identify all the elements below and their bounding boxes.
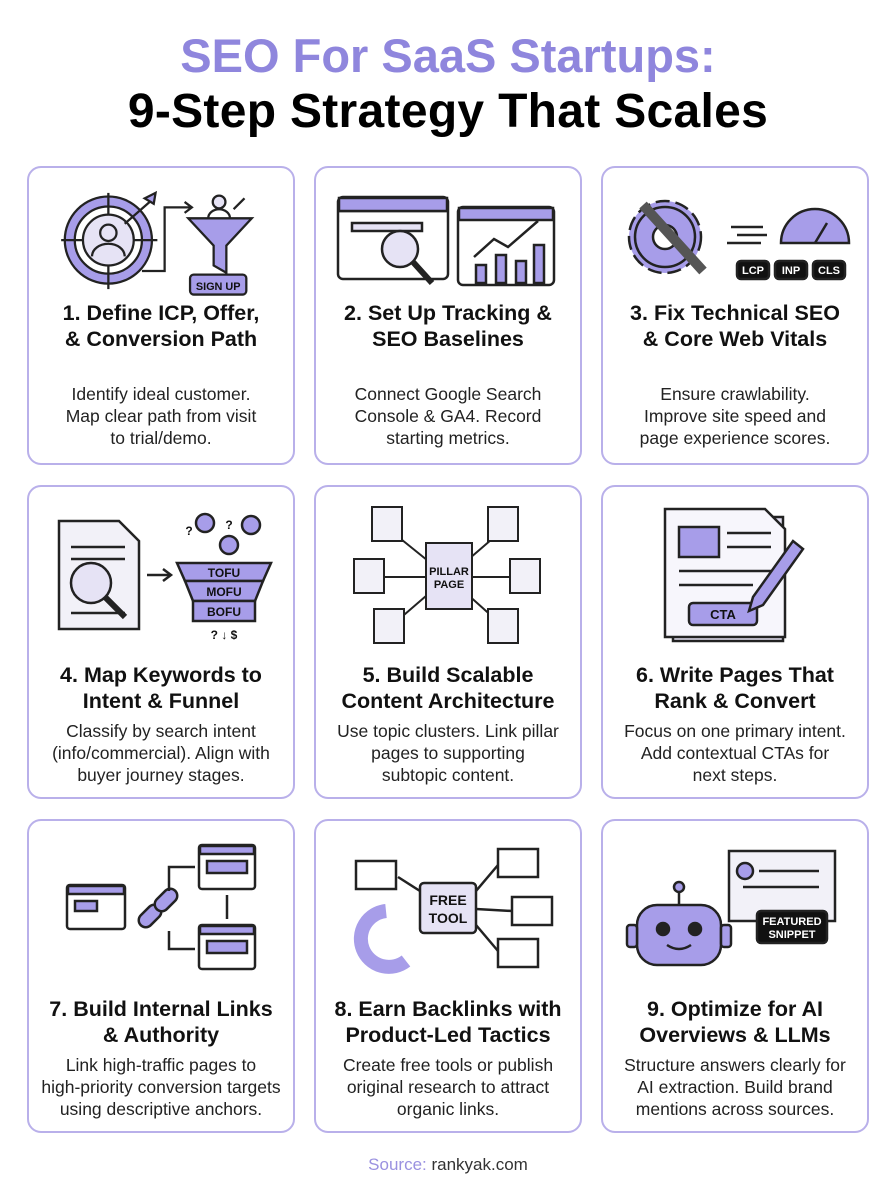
step 8 title: Product-Led Tactics: [345, 1023, 551, 1047]
step 6 title: [636, 663, 834, 713]
step 4 text: [52, 721, 270, 785]
step 1 title: & Conversion Path: [65, 327, 257, 351]
panel: step 3: [601, 166, 869, 465]
source footer: Source: rankyak.com: [368, 1155, 528, 1174]
panel: step 9: [601, 819, 869, 1133]
icon: browser with magnifier and chart: [336, 196, 556, 286]
icon: pillar and cluster pages: PILLAR: [429, 566, 469, 578]
panel: step 2: [314, 166, 582, 465]
step 3 title: 3. Fix Technical SEO: [630, 301, 840, 325]
icon: document and keyword funnel: [58, 512, 273, 642]
icon: document and keyword funnel: MOFU: [206, 585, 242, 599]
panel: step 4: [27, 485, 295, 799]
panel: step 7: [27, 819, 295, 1133]
step 3 title: & Core Web Vitals: [643, 327, 827, 351]
icon: free tool magnet: TOOL: [429, 910, 468, 926]
icon: target and funnel: [61, 190, 254, 296]
icon: document and keyword funnel: ? ↓ $: [211, 628, 238, 642]
step 8 title: 8. Earn Backlinks with: [334, 997, 562, 1021]
step 5 text: Use topic clusters. Link pillar: [337, 721, 559, 741]
step 9 text: [624, 1055, 846, 1119]
step 5 title: Content Architecture: [341, 689, 555, 713]
step 2 text: starting metrics.: [386, 428, 510, 448]
step 9 title: Overviews & LLMs: [639, 1023, 831, 1047]
step 7 title: & Authority: [103, 1023, 219, 1047]
step 1 text: [66, 384, 256, 448]
step 1 title: [63, 301, 259, 351]
step 4 title: Intent & Funnel: [83, 689, 239, 713]
icon: pillar and cluster pages: PAGE: [434, 579, 464, 591]
title line 2: 9-Step Strategy That Scales: [128, 85, 768, 138]
step 4 text: (info/commercial). Align with: [52, 743, 270, 763]
step 7 text: Link high-traffic pages to: [66, 1055, 256, 1075]
icon: gear, wrench and gauge: LCP: [742, 265, 764, 277]
step 4 text: Classify by search intent: [66, 721, 256, 741]
step 6 title: 6. Write Pages That: [636, 663, 834, 687]
step 4 text: buyer journey stages.: [77, 765, 245, 785]
step 7 text: using descriptive anchors.: [60, 1099, 262, 1119]
step 7 title: [49, 997, 273, 1047]
icon: free tool magnet: [354, 848, 554, 974]
icon: document and keyword funnel: BOFU: [207, 605, 241, 619]
step 2 title: 2. Set Up Tracking &: [344, 301, 552, 325]
step 6 text: Add contextual CTAs for: [641, 743, 829, 763]
icon: pillar and cluster pages: [353, 506, 541, 644]
step 2 text: [355, 384, 541, 448]
step 3 text: Ensure crawlability.: [660, 384, 810, 404]
step 7 text: [41, 1055, 281, 1119]
icon: document with CTA and pen: CTA: [710, 607, 736, 622]
step 5 text: subtopic content.: [382, 765, 514, 785]
step 9 text: AI extraction. Build brand: [637, 1077, 833, 1097]
panel: step 5: [314, 485, 582, 799]
step 5 title: 5. Build Scalable: [363, 663, 533, 687]
icon: gear, wrench and gauge: CLS: [818, 265, 840, 277]
icon: gear, wrench and gauge: INP: [782, 265, 800, 277]
step 6 text: next steps.: [693, 765, 777, 785]
step 1 text: Map clear path from visit: [66, 406, 256, 426]
step 3 title: [630, 301, 840, 351]
icon: linked pages: [66, 844, 256, 970]
icon: document with CTA and pen: [664, 508, 805, 642]
step 6 text: Focus on one primary intent.: [624, 721, 846, 741]
icon: gear, wrench and gauge: [628, 200, 850, 280]
icon: robot and snippet bubble: FEATURED: [762, 916, 822, 928]
icon: document and keyword funnel: ?: [185, 524, 193, 538]
step 8 text: [343, 1055, 553, 1119]
icon: target and funnel: SIGN UP: [196, 281, 241, 293]
step 8 text: original research to attract: [347, 1077, 549, 1097]
step 5 text: [337, 721, 559, 785]
step 1 title: 1. Define ICP, Offer,: [63, 301, 259, 325]
step 9 title: 9. Optimize for AI: [647, 997, 823, 1021]
step 4 title: [60, 663, 262, 713]
step 5 title: [341, 663, 555, 713]
step 8 text: organic links.: [397, 1099, 499, 1119]
step 2 text: Console & GA4. Record: [355, 406, 541, 426]
step 3 text: page experience scores.: [640, 428, 830, 448]
step 9 text: Structure answers clearly for: [624, 1055, 846, 1075]
step 9 title: [639, 997, 831, 1047]
step 1 text: Identify ideal customer.: [72, 384, 250, 404]
step 6 text: [624, 721, 846, 785]
title line 1: SEO For SaaS Startups:: [180, 29, 716, 82]
panel: step 6: [601, 485, 869, 799]
step 8 text: Create free tools or publish: [343, 1055, 553, 1075]
panel: step 8: [314, 819, 582, 1133]
step 2 text: Connect Google Search: [355, 384, 541, 404]
step 5 text: pages to supporting: [371, 743, 525, 763]
step 6 title: Rank & Convert: [654, 689, 816, 713]
step 7 title: 7. Build Internal Links: [49, 997, 273, 1021]
step 2 title: [344, 301, 552, 351]
icon: robot and snippet bubble: SNIPPET: [768, 929, 816, 941]
icon: document and keyword funnel: TOFU: [208, 566, 240, 580]
step 2 title: SEO Baselines: [372, 327, 524, 351]
icon: document and keyword funnel: ?: [225, 518, 233, 532]
icon: robot and snippet bubble: [626, 850, 836, 966]
panel: step 1: [27, 166, 295, 465]
icon: free tool magnet: FREE: [429, 892, 467, 908]
step 4 title: 4. Map Keywords to: [60, 663, 262, 687]
step 8 title: [334, 997, 562, 1047]
step 3 text: Improve site speed and: [644, 406, 826, 426]
step 1 text: to trial/demo.: [110, 428, 212, 448]
step 7 text: high-priority conversion targets: [41, 1077, 281, 1097]
step 9 text: mentions across sources.: [636, 1099, 834, 1119]
step 3 text: [640, 384, 830, 448]
